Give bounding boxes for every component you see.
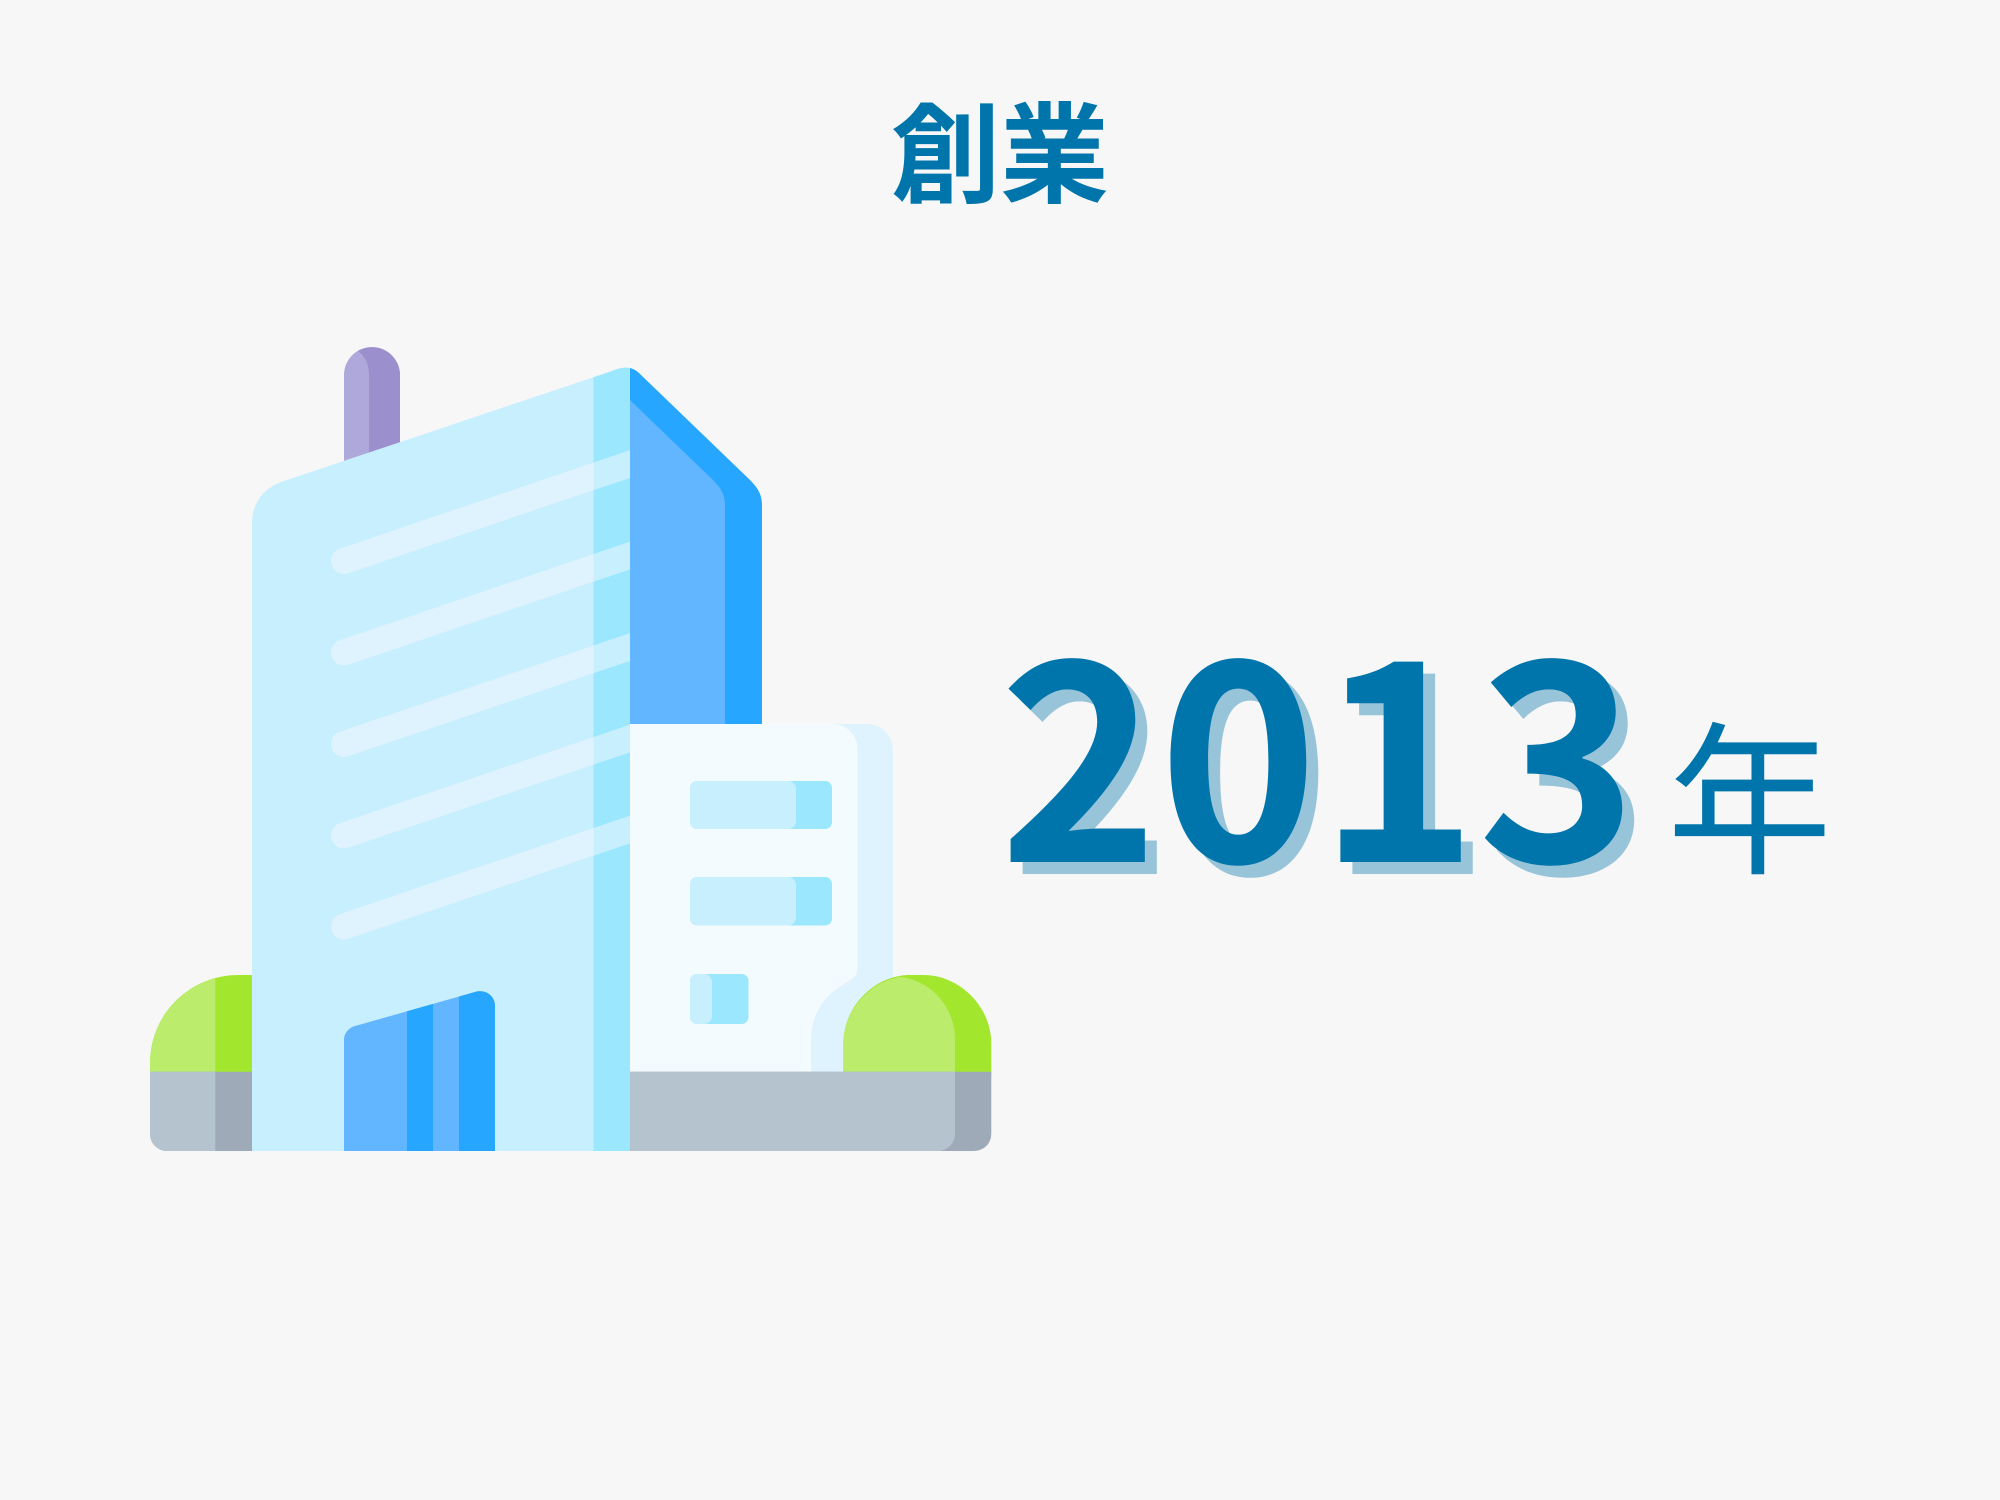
left base xyxy=(150,1072,252,1151)
title: 創業 xyxy=(891,69,1109,226)
annex window 2 xyxy=(690,877,832,926)
year number: 2013 xyxy=(999,548,1637,940)
right base xyxy=(630,1072,991,1151)
tower shaded band xyxy=(594,360,630,1151)
annex building xyxy=(630,724,893,1072)
icon: office building xyxy=(150,347,992,1151)
tower front face xyxy=(252,368,630,1151)
left bush xyxy=(150,975,252,1075)
antenna xyxy=(344,347,400,480)
door xyxy=(344,980,495,1155)
annex window 3 xyxy=(690,974,748,1024)
right bush xyxy=(843,975,991,1075)
year unit: 年 xyxy=(1667,670,1832,909)
annex window 1 xyxy=(690,781,832,829)
tower side face xyxy=(630,368,762,730)
tower window strips xyxy=(344,447,680,926)
